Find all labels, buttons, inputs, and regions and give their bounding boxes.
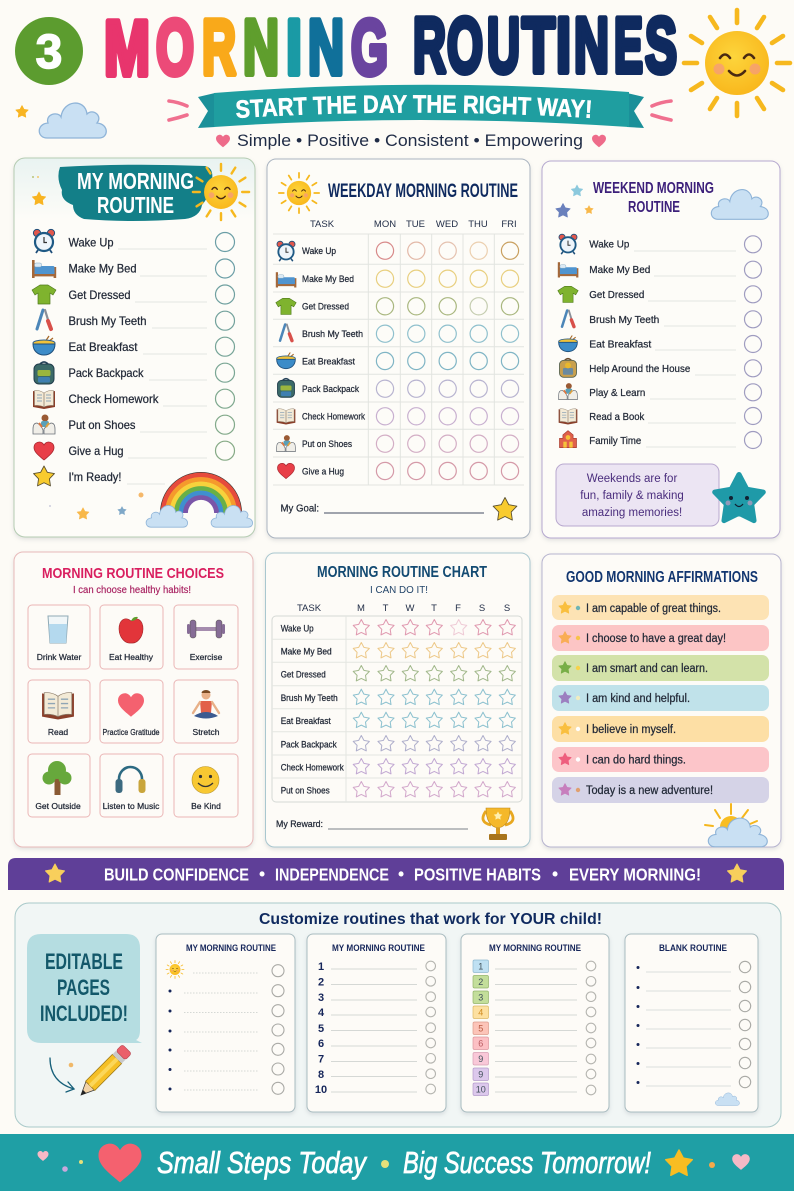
row: play and learn — [559, 383, 762, 401]
mini card: coloured numbers: 10 — [476, 1084, 486, 1094]
title: R — [202, 3, 236, 91]
choice: exercise — [174, 605, 238, 669]
table grid — [273, 234, 524, 485]
panel card — [14, 158, 255, 537]
task rows — [276, 241, 519, 480]
table header: THU — [468, 219, 488, 230]
row: put on shoes — [33, 414, 234, 434]
mini card: numbered: 7 — [318, 1054, 324, 1066]
table header: F — [455, 603, 461, 614]
icon: pencil — [76, 1044, 132, 1100]
choice: practice gratitude: Practice Gratitude — [102, 727, 160, 737]
row: brush teeth — [281, 689, 515, 705]
panel card — [15, 903, 781, 1127]
icon: star right — [727, 864, 747, 882]
row: pack backpack — [281, 736, 515, 751]
row: put on shoes — [281, 782, 515, 797]
row: make bed — [281, 642, 515, 658]
speech bubble: editable pages — [27, 934, 142, 1043]
panel: good morning affirmations — [542, 554, 781, 847]
table header: S — [504, 603, 510, 614]
row: get dressed — [281, 666, 515, 681]
title: N — [243, 3, 279, 91]
row: make bed — [32, 259, 234, 278]
speech bubble: editable pages: EDITABLE — [45, 949, 123, 974]
icon: star and heart right — [666, 1150, 750, 1175]
mini card: coloured numbers: 1 — [478, 962, 483, 972]
choice: stretch: Stretch — [193, 727, 220, 737]
affirmation: capable — [552, 595, 769, 620]
mini card: numbered: 2 — [318, 976, 324, 988]
row: wake up: Wake Up — [281, 624, 314, 634]
affirmation: hard things — [552, 747, 769, 772]
mini card: coloured numbers: MY MORNING ROUTINE — [489, 943, 581, 954]
row: pack backpack: Pack Backpack — [68, 366, 144, 380]
callout: Weekends are for — [587, 473, 677, 485]
banner text: • — [398, 864, 404, 884]
mini card: numbered: MY MORNING ROUTINE — [332, 943, 425, 954]
panel: weekday morning routine — [267, 159, 530, 538]
table header: T — [383, 603, 389, 614]
row: brush teeth: Brush My Teeth — [302, 329, 363, 340]
row: wake up: Wake Up — [589, 238, 629, 250]
title: O — [156, 3, 194, 91]
mini card: numbered: 4 — [318, 1007, 325, 1019]
icon: trophy — [483, 808, 513, 840]
tagline: Simple • Positive • Consistent • Empowering — [237, 131, 583, 150]
row: read a book: Read a Book — [589, 411, 645, 423]
icon: smiling sun — [684, 10, 790, 116]
panel: morning routine chart — [266, 553, 530, 847]
panel card — [266, 553, 530, 847]
task rows — [281, 620, 515, 797]
row: help around the house: Help Around the House — [589, 363, 690, 375]
choice: drink water: Drink Water — [37, 652, 81, 662]
choice: listen to music — [100, 754, 163, 817]
row: get dressed: Get Dressed — [589, 289, 644, 301]
choice: exercise: Exercise — [190, 652, 223, 662]
row: get dressed: Get Dressed — [281, 670, 326, 680]
row: ready: I'm Ready! — [68, 470, 122, 484]
row: brush teeth — [562, 310, 762, 328]
title — [104, 1, 677, 92]
mini card: numbered: 10 — [315, 1084, 327, 1096]
row: play and learn: Play & Learn — [589, 387, 645, 399]
table header: T — [431, 603, 437, 614]
row: ready — [34, 466, 165, 486]
mini card: numbered: 1 — [318, 961, 324, 973]
ribbon banner: START THE DAY THE RIGHT WAY! — [236, 95, 591, 118]
row: eat breakfast: Eat Breakfast — [302, 356, 355, 368]
purple banner — [8, 858, 784, 890]
row: put on shoes: Put on Shoes — [281, 786, 330, 796]
row: give a hug — [278, 462, 519, 480]
heading: MY MORNING — [77, 168, 194, 194]
panel card — [542, 554, 781, 847]
heading — [593, 180, 714, 216]
banner text: BUILD CONFIDENCE — [104, 864, 249, 884]
affirmation: smart — [552, 655, 769, 681]
mini card: coloured numbers: 2 — [478, 977, 483, 987]
icon: stars — [556, 185, 593, 217]
row: eat breakfast — [277, 352, 519, 370]
icon: cloud — [711, 190, 768, 219]
icon: sparkle — [69, 1063, 73, 1067]
speech bubble: editable pages: INCLUDED! — [40, 1001, 128, 1026]
speech bubble: editable pages: PAGES — [57, 975, 110, 1000]
title: I — [286, 3, 302, 91]
choice: eat healthy — [100, 605, 163, 669]
subheading: I can choose healthy habits! — [73, 585, 191, 596]
title: N — [308, 3, 344, 91]
icon: rainbow with clouds — [146, 472, 253, 527]
banner text: POSITIVE HABITS — [414, 864, 541, 884]
goal line — [280, 498, 517, 520]
banner text — [104, 864, 701, 884]
choice: eat healthy: Eat Healthy — [109, 652, 154, 662]
row: brush teeth — [280, 324, 519, 342]
affirmation: believe — [552, 716, 769, 742]
icon: sun — [279, 173, 319, 213]
row: put on shoes: Put on Shoes — [68, 418, 136, 432]
choice: be kind: Be Kind — [191, 801, 221, 811]
subheading: I CAN DO IT! — [370, 584, 428, 596]
badge: number 3 — [15, 17, 83, 85]
row: wake up: Wake Up — [302, 246, 336, 257]
panel card — [14, 552, 253, 847]
title: T — [522, 1, 555, 89]
row: wake up — [33, 229, 235, 253]
row: family time: Family Time — [589, 435, 641, 447]
affirmation: smart: I am smart and can learn. — [586, 663, 708, 675]
decorative pink dashes — [169, 101, 671, 120]
mini card: coloured numbers: 5 — [478, 1024, 483, 1034]
title: O — [447, 1, 483, 89]
mini card: coloured numbers: 9 — [478, 1070, 483, 1080]
row: eat breakfast: Eat Breakfast — [589, 338, 651, 350]
choice: practice gratitude — [100, 680, 163, 743]
mini card: numbered: 6 — [318, 1038, 324, 1050]
badge: number 3: 3 — [36, 26, 62, 79]
header — [15, 1, 792, 150]
ribbon banner — [198, 84, 644, 128]
row: get dressed: Get Dressed — [302, 302, 349, 312]
footer slogan: Small Steps Today — [157, 1145, 368, 1180]
row: eat breakfast — [281, 712, 515, 728]
row: brush teeth — [37, 310, 234, 330]
table header: TUE — [406, 219, 425, 230]
title: E — [614, 1, 643, 89]
affirmation: believe: I believe in myself. — [586, 724, 676, 736]
goal line: My Goal: — [280, 502, 319, 514]
affirmation: kind — [552, 685, 769, 711]
row: get dressed — [32, 285, 234, 304]
mini card: coloured numbers: 3 — [478, 992, 483, 1002]
table header: FRI — [501, 219, 517, 230]
icon: star left — [45, 864, 65, 882]
table header: WED — [436, 219, 458, 230]
affirmation: hard things: I can do hard things. — [586, 754, 686, 766]
affirmation: adventure — [552, 777, 769, 803]
row: eat breakfast: Eat Breakfast — [68, 340, 138, 354]
table header: S — [479, 603, 485, 614]
row: check homework — [277, 408, 519, 425]
choice: listen to music: Listen to Music — [103, 801, 160, 811]
callout — [556, 464, 719, 526]
affirmation: great day: I choose to have a great day! — [586, 633, 726, 645]
panel: weekend morning routine — [542, 161, 780, 538]
affirmation: great day — [552, 625, 769, 651]
row: give a hug — [34, 441, 234, 460]
mini card: numbered: 5 — [318, 1023, 324, 1035]
panel card — [542, 161, 780, 538]
row: wake up: Wake Up — [68, 236, 114, 250]
title: S — [645, 1, 677, 89]
choice: read — [28, 680, 90, 743]
mini card: sun bullets — [156, 934, 295, 1112]
mini card: coloured numbers: 6 — [478, 1038, 483, 1048]
row: wake up — [277, 241, 519, 261]
row: pack backpack: Pack Backpack — [281, 740, 337, 750]
row: give a hug: Give a Hug — [302, 466, 344, 478]
row: check homework: Check Homework — [302, 412, 365, 422]
row: make bed: Make My Bed — [68, 262, 136, 276]
table grid — [272, 616, 522, 802]
affirmation: adventure: Today is a new adventure! — [586, 785, 713, 797]
row: get dressed — [558, 286, 762, 303]
icon: cloud and star — [16, 103, 106, 138]
row: make bed — [558, 261, 762, 278]
mini card: numbered: 8 — [318, 1069, 324, 1081]
icon: stars — [32, 176, 46, 205]
heading — [58, 165, 212, 221]
heading: Customize routines that work for YOUR child! — [259, 911, 602, 928]
footer banner — [0, 1134, 794, 1191]
icon: smiling teal star — [715, 474, 763, 521]
mini card: blank routine: BLANK ROUTINE — [659, 943, 727, 954]
title: I — [556, 1, 571, 89]
heading: MORNING ROUTINE CHOICES — [42, 565, 224, 582]
row: brush teeth: Brush My Teeth — [68, 314, 146, 328]
title: R — [413, 1, 446, 89]
banner text: • — [552, 864, 558, 884]
row: pack backpack: Pack Backpack — [302, 384, 359, 395]
table header — [297, 603, 510, 614]
table header — [310, 219, 517, 230]
row: wake up — [281, 620, 515, 635]
row: make bed: Make My Bed — [302, 274, 354, 285]
icon: sun — [193, 164, 249, 220]
row: check homework — [281, 758, 515, 774]
mini card: coloured numbers — [461, 934, 609, 1112]
row: make bed: Make My Bed — [281, 646, 332, 656]
row: check homework: Check Homework — [281, 762, 344, 772]
row: check homework — [33, 389, 234, 409]
row: brush teeth: Brush My Teeth — [589, 314, 659, 326]
banner text: EVERY MORNING! — [569, 864, 701, 884]
footer slogan — [157, 1145, 651, 1180]
mini card: coloured numbers: 4 — [478, 1008, 483, 1018]
heading: ROUTINE — [97, 192, 174, 218]
row: put on shoes: Put on Shoes — [302, 439, 352, 450]
reward line: My Reward: — [276, 819, 323, 830]
mini card: sun bullets: MY MORNING ROUTINE — [186, 943, 276, 954]
row: help around the house — [560, 359, 762, 377]
mini card: blank routine — [625, 934, 758, 1112]
table header: W — [406, 603, 415, 614]
choice: get outside — [28, 754, 90, 817]
mini card: numbered: 3 — [318, 992, 324, 1004]
choice: read: Read — [48, 727, 68, 737]
row: get dressed — [276, 298, 519, 315]
panel: my morning routine — [14, 158, 255, 537]
title: M — [104, 4, 150, 92]
affirmation: capable: I am capable of great things. — [586, 603, 721, 615]
title: N — [574, 1, 609, 89]
row: pack backpack — [278, 379, 519, 397]
checklist — [32, 229, 234, 486]
choice: get outside: Get Outside — [35, 801, 81, 811]
checklist — [558, 234, 762, 448]
row: make bed — [276, 270, 519, 288]
row: wake up — [559, 234, 762, 254]
row: family time — [560, 431, 762, 448]
row: check homework: Check Homework — [68, 392, 159, 406]
heading: WEEKDAY MORNING ROUTINE — [328, 181, 518, 202]
table header: TASK — [297, 603, 322, 614]
icon: small stars — [49, 492, 144, 519]
heading: MORNING ROUTINE CHART — [317, 564, 487, 581]
mini card: numbered — [307, 934, 446, 1112]
row: eat breakfast — [559, 336, 762, 352]
callout: amazing memories! — [582, 507, 682, 519]
table header: MON — [374, 219, 396, 230]
row: make bed: Make My Bed — [589, 264, 650, 276]
choice: drink water — [28, 605, 90, 669]
footer slogan: Big Success Tomorrow! — [403, 1145, 651, 1180]
title: G — [351, 3, 388, 91]
arrow — [50, 1058, 74, 1092]
banner text: • — [259, 864, 265, 884]
banner text: INDEPENDENCE — [275, 864, 389, 884]
row: brush teeth: Brush My Teeth — [281, 693, 338, 703]
row: put on shoes — [277, 435, 519, 452]
row: give a hug: Give a Hug — [68, 444, 124, 458]
table header: TASK — [310, 219, 335, 230]
panel: morning routine choices — [14, 552, 253, 847]
row: eat breakfast: Eat Breakfast — [281, 716, 331, 726]
row: eat breakfast — [33, 336, 234, 356]
row: pack backpack — [34, 362, 234, 384]
icon: sun behind cloud — [705, 804, 767, 847]
callout: fun, family & making — [580, 490, 684, 502]
choice: stretch — [174, 680, 238, 743]
icon: hearts and dots left — [38, 1144, 142, 1182]
title: U — [487, 1, 520, 89]
panel: customize routines — [15, 903, 781, 1127]
panel card — [267, 159, 530, 538]
table header: M — [357, 603, 365, 614]
mini card: coloured numbers: 9 — [478, 1054, 483, 1064]
choice: be kind — [174, 754, 238, 817]
heading: ROUTINE — [628, 199, 680, 216]
row: get dressed: Get Dressed — [68, 288, 130, 302]
heading: WEEKEND MORNING — [593, 180, 714, 197]
row: read a book — [559, 408, 762, 424]
affirmation: kind: I am kind and helpful. — [586, 693, 690, 705]
